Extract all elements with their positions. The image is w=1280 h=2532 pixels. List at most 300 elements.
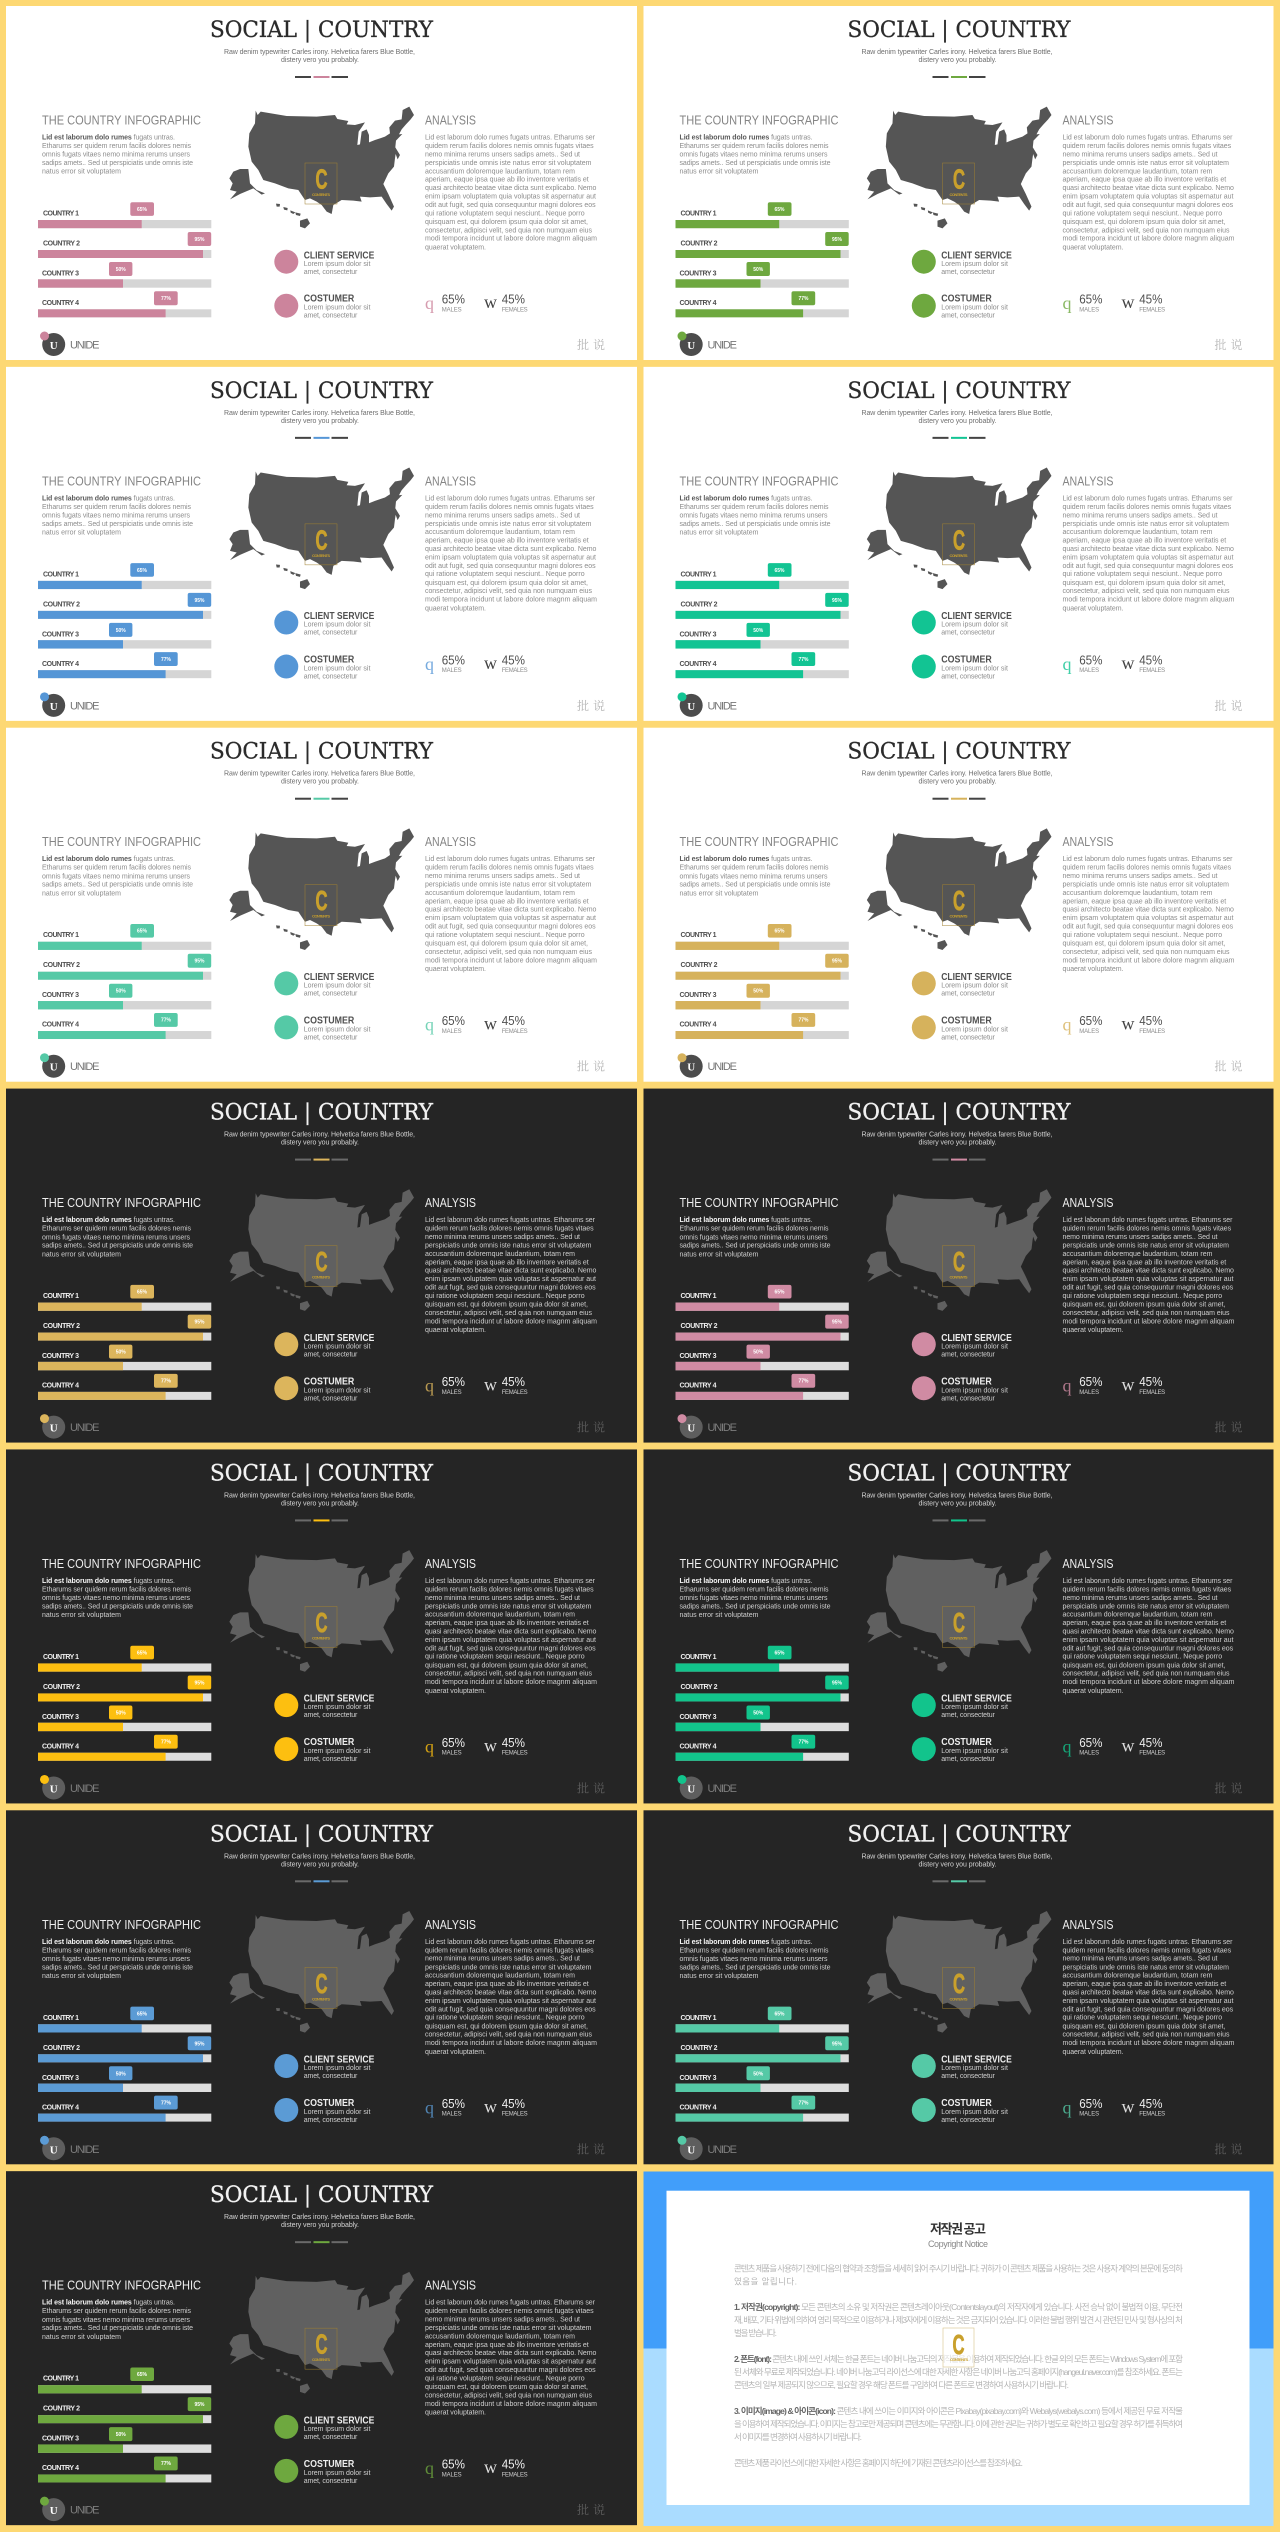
map: usa with logo: CONTENTS <box>950 1275 968 1280</box>
text: costumer: Lorem ipsum dolor sit <box>941 2109 1008 2116</box>
bar: country 1: 65% <box>774 929 785 935</box>
heading: the country infographic: THE COUNTRY INFOGRAPHIC <box>42 1556 201 1571</box>
stat: females: FEMALES <box>1139 2112 1165 2118</box>
analysis paragraph <box>425 1217 597 1334</box>
stat: males: MALES <box>442 2472 462 2478</box>
analysis paragraph: odit aut fugit, sed quia consequuntur magni dolores eos <box>425 2367 596 2374</box>
text: client service: CLIENT SERVICE <box>304 2414 374 2426</box>
analysis paragraph: modi tempora incidunt ut labore dolore magnm aliquam <box>425 1679 597 1686</box>
text: costumer: amet, consectetur <box>304 2478 358 2485</box>
text: costumer: Lorem ipsum dolor sit <box>304 2470 370 2477</box>
panel: dark amber slide <box>6 1449 637 1803</box>
analysis paragraph: enim ipsam voluptatem quia voluptas sit aspernatur aut <box>1062 1637 1234 1644</box>
icon: costumer <box>912 655 936 679</box>
subtitle: distery vero you probably. <box>918 779 997 786</box>
analysis paragraph: qui ratione voluptatem sequi nesciunt.. Neque porro <box>425 2375 585 2382</box>
stat: males: q <box>1062 2097 1072 2117</box>
text: costumer: amet, consectetur <box>941 674 996 681</box>
subtitle: distery vero you probably. <box>281 1500 359 1507</box>
subtitle <box>224 410 415 425</box>
text: costumer: amet, consectetur <box>941 2117 996 2124</box>
stat: males <box>1062 2096 1103 2118</box>
analysis paragraph: Lid est laborum dolo rumes fugats untras. Etharums ser <box>425 856 596 863</box>
bar: country 3: 50% <box>753 628 764 634</box>
bar: country 2: 95% <box>832 1680 843 1686</box>
text: costumer: Lorem ipsum dolor sit <box>304 1387 370 1394</box>
stat: females: FEMALES <box>1139 668 1165 674</box>
icon: client service <box>274 1332 298 1356</box>
icon: costumer <box>274 1376 298 1400</box>
notice body text: 벌을 받습니다. <box>734 2328 777 2338</box>
intro paragraph: Lid est laborum dolo rumes fugats untras. <box>680 134 813 142</box>
text: costumer: amet, consectetur <box>304 1034 358 1041</box>
heading: copyright notice korean: 저작권 공고 <box>930 2222 986 2236</box>
analysis paragraph: quisquam est, qui dolorem ipsum quia dolor sit amet, <box>425 1662 588 1669</box>
analysis paragraph: Lid est laborum dolo rumes fugats untras. Etharums ser <box>425 1578 596 1585</box>
analysis paragraph: quisquam est, qui dolorem ipsum quia dolor sit amet, <box>425 941 588 948</box>
logo: contents watermark <box>943 2328 974 2367</box>
stat: females: 45% <box>1139 1735 1163 1750</box>
analysis paragraph: consectetur, adipisci velit, sed quia non numquam eius <box>1062 2032 1230 2039</box>
title: SOCIAL | COUNTRY <box>210 2183 433 2208</box>
stat: males: 65% <box>442 2096 465 2111</box>
analysis paragraph: quisquam est, qui dolorem ipsum quia dolor sit amet, <box>425 1302 588 1309</box>
heading: the country infographic: THE COUNTRY INFOGRAPHIC <box>42 473 201 488</box>
intro paragraph: sadips amets.. Sed ut perspiciatis unde omnis iste <box>42 1603 193 1610</box>
bar chart: countries <box>676 202 849 317</box>
text: client service: amet, consectetur <box>941 630 996 637</box>
analysis paragraph: aperiam, eaque ipsa quae ab illo inventore veritatis et <box>425 1259 589 1266</box>
bar: country 1: 65% <box>137 929 148 935</box>
text: costumer: amet, consectetur <box>941 1756 996 1763</box>
intro paragraph: Etharums ser quidem rerum facilis dolores nemis <box>680 865 829 872</box>
bar: country 3: 50% <box>753 989 764 995</box>
analysis paragraph: quisquam est, qui dolorem ipsum quia dolor sit amet, <box>425 2384 588 2391</box>
bar: country 1: 65% <box>774 207 785 213</box>
stat: males <box>425 2096 465 2118</box>
stat: males: q <box>425 1015 434 1035</box>
intro paragraph: natus error sit voluptatem <box>42 1973 121 1980</box>
intro paragraph: Etharums ser quidem rerum facilis dolores nemis <box>42 865 192 872</box>
subtitle <box>862 1853 1053 1868</box>
analysis paragraph <box>425 1939 597 2056</box>
bar: country 4 <box>676 1374 849 1400</box>
bar chart: countries <box>676 924 849 1039</box>
analysis paragraph: Lid est laborum dolo rumes fugats untras. Etharums ser <box>1062 856 1233 863</box>
heading: analysis: ANALYSIS <box>425 1195 476 1210</box>
analysis paragraph: quaerat voluptatem. <box>425 244 486 252</box>
analysis paragraph: odit aut fugit, sed quia consequuntur magni dolores eos <box>1062 2006 1234 2013</box>
analysis paragraph: modi tempora incidunt ut labore dolore magnm aliquam <box>1062 1318 1235 1325</box>
stat: females: w <box>484 2096 497 2116</box>
analysis paragraph: perspiciatis unde omnis iste natus error sit voluptatem <box>1062 1603 1229 1610</box>
analysis paragraph: qui ratione voluptatem sequi nesciunt.. Neque porro <box>1062 1654 1222 1661</box>
text: costumer: Lorem ipsum dolor sit <box>304 666 370 673</box>
subtitle: Raw denim typewriter Carles irony. Helvetica farers Blue Bottle, <box>224 771 415 778</box>
analysis paragraph: consectetur, adipisci velit, sed quia non numquam eius <box>1062 588 1230 595</box>
bar: country 2 <box>38 232 211 258</box>
text: costumer: amet, consectetur <box>941 313 996 320</box>
text: costumer: amet, consectetur <box>304 313 358 320</box>
bar: country 1: 65% <box>774 1290 785 1296</box>
logo: unide: UNIDE <box>70 1061 100 1073</box>
stat: females: w <box>484 2457 497 2477</box>
bar: country 1: COUNTRY 1 <box>43 1654 79 1661</box>
stat: females <box>484 292 528 313</box>
bar chart: countries <box>676 1285 849 1400</box>
subtitle <box>224 1853 415 1868</box>
corner characters: 批 说 <box>1214 697 1242 714</box>
subtitle: distery vero you probably. <box>281 1140 359 1147</box>
bar: country 2: COUNTRY 2 <box>680 962 718 969</box>
bar: country 3 <box>38 1345 211 1370</box>
icon: client service <box>912 971 936 995</box>
analysis paragraph: quasi architecto beatae vitae dicta sunt explicabo. Nemo <box>425 1268 596 1275</box>
bar: country 3: 50% <box>753 2071 764 2077</box>
text: costumer: Lorem ipsum dolor sit <box>941 305 1008 312</box>
icon: client service <box>912 611 936 635</box>
divider <box>932 76 986 78</box>
subtitle: Raw denim typewriter Carles irony. Helvetica farers Blue Bottle, <box>224 1132 415 1139</box>
analysis paragraph: quaerat voluptatem. <box>425 2049 486 2056</box>
logo: unide: U <box>687 701 695 713</box>
bar: country 1 <box>676 924 849 950</box>
divider <box>932 1880 986 1882</box>
heading: the country infographic: THE COUNTRY INFOGRAPHIC <box>42 1195 201 1210</box>
logo: unide: UNIDE <box>708 2144 737 2156</box>
notice body text: 콘텐츠 제품 라이선스에 대한 자세한 사항은 홈페이지 하단에 기재된 콘텐츠라이선스를 참조하세요. <box>734 2458 1023 2468</box>
heading: the country infographic: THE COUNTRY INFOGRAPHIC <box>680 112 838 128</box>
text: client service: amet, consectetur <box>304 991 358 998</box>
text: client service <box>304 249 374 276</box>
heading: analysis: ANALYSIS <box>425 112 476 128</box>
divider <box>295 1880 348 1882</box>
corner characters: 批 说 <box>1214 2140 1242 2157</box>
bar: country 4 <box>38 1374 211 1400</box>
analysis paragraph: odit aut fugit, sed quia consequuntur magni dolores eos <box>1062 1285 1234 1292</box>
logo: unide: U <box>50 2505 58 2517</box>
intro paragraph: natus error sit voluptatem <box>680 1973 759 1980</box>
bar chart: countries <box>38 2367 211 2482</box>
bar: country 1: 65% <box>137 1290 148 1296</box>
subtitle: Raw denim typewriter Carles irony. Helvetica farers Blue Bottle, <box>224 410 415 417</box>
notice body text: 1. 저작권(copyright): 모든 콘텐츠의 소유 및 저작권은 콘텐츠레이아웃(Contentslayout)의 저작자에게 있습니다. 사전 승낙 없이 불법적 이용, 무단전 <box>734 2302 1183 2312</box>
map: usa with logo <box>229 107 414 228</box>
divider <box>932 437 986 439</box>
intro paragraph: Etharums ser quidem rerum facilis dolores nemis <box>42 504 192 511</box>
analysis paragraph: quisquam est, qui dolorem ipsum quia dolor sit amet, <box>1062 219 1226 226</box>
analysis paragraph: quidem rerum facilis dolores nemis omnis fugats vitaes <box>1062 1947 1232 1954</box>
analysis paragraph: accusantium doloremque laudantium, totam rem <box>425 1612 575 1619</box>
text: client service: CLIENT SERVICE <box>304 1332 374 1344</box>
analysis paragraph: Lid est laborum dolo rumes fugats untras. Etharums ser <box>1062 134 1233 142</box>
title: SOCIAL | COUNTRY <box>210 379 433 404</box>
logo: unide: UNIDE <box>70 2144 100 2156</box>
stat: males: 65% <box>442 1013 465 1028</box>
intro paragraph <box>42 856 193 897</box>
analysis paragraph: qui ratione voluptatem sequi nesciunt.. Neque porro <box>1062 932 1222 939</box>
text: client service: amet, consectetur <box>941 1351 996 1358</box>
bar chart: countries <box>676 2007 849 2122</box>
subtitle: distery vero you probably. <box>281 779 359 786</box>
stat: females <box>484 1735 528 1757</box>
analysis paragraph: odit aut fugit, sed quia consequuntur magni dolores eos <box>1062 563 1234 570</box>
stat: females: FEMALES <box>502 1390 528 1396</box>
icon: client service <box>912 1693 936 1717</box>
heading: analysis: ANALYSIS <box>425 2278 476 2293</box>
stat: females <box>1122 1374 1165 1396</box>
analysis paragraph: quidem rerum facilis dolores nemis omnis fugats vitaes <box>1062 1226 1232 1233</box>
subtitle: Raw denim typewriter Carles irony. Helvetica farers Blue Bottle, <box>862 1132 1053 1139</box>
intro paragraph: Etharums ser quidem rerum facilis dolores nemis <box>42 1586 192 1593</box>
logo: unide: UNIDE <box>70 700 100 712</box>
analysis paragraph: perspiciatis unde omnis iste natus error sit voluptatem <box>1062 882 1229 889</box>
analysis paragraph: consectetur, adipisci velit, sed quia non numquam eius <box>1062 1310 1230 1317</box>
map: usa with logo <box>867 1911 1051 2033</box>
text: client service <box>941 249 1012 276</box>
text: client service <box>941 610 1012 637</box>
logo: contents watermark: CONTENTS <box>950 2357 968 2362</box>
analysis paragraph: accusantium doloremque laudantium, totam rem <box>1062 168 1213 175</box>
analysis paragraph: accusantium doloremque laudantium, totam rem <box>1062 1612 1213 1619</box>
bar: country 4: 77% <box>161 1018 172 1024</box>
bar: country 2: 95% <box>194 2041 205 2047</box>
divider <box>932 798 986 800</box>
analysis paragraph: quasi architecto beatae vitae dicta sunt explicabo. Nemo <box>1062 1268 1234 1275</box>
text: costumer: COSTUMER <box>941 293 992 305</box>
bar: country 2: COUNTRY 2 <box>680 2045 718 2052</box>
stat: males: MALES <box>1079 1751 1099 1757</box>
intro paragraph <box>680 856 831 897</box>
analysis paragraph: quisquam est, qui dolorem ipsum quia dolor sit amet, <box>1062 1662 1226 1669</box>
stat: males: MALES <box>442 1390 462 1396</box>
text: client service <box>941 1693 1012 1719</box>
text: costumer: COSTUMER <box>941 1375 992 1387</box>
analysis paragraph: odit aut fugit, sed quia consequuntur magni dolores eos <box>425 202 596 209</box>
analysis paragraph: aperiam, eaque ipsa quae ab illo inventore veritatis et <box>1062 538 1226 545</box>
heading: the country infographic: THE COUNTRY INFOGRAPHIC <box>680 834 838 849</box>
divider <box>295 1159 348 1161</box>
bar: country 4: 77% <box>161 657 172 663</box>
logo: unide: U <box>50 1783 58 1795</box>
map: usa with logo: C <box>953 1246 965 1277</box>
stat: males <box>1062 652 1103 674</box>
analysis paragraph: quasi architecto beatae vitae dicta sunt explicabo. Nemo <box>1062 1628 1234 1635</box>
analysis paragraph: quisquam est, qui dolorem ipsum quia dolor sit amet, <box>1062 1302 1226 1309</box>
bar: country 1: COUNTRY 1 <box>43 2376 79 2383</box>
icon: costumer <box>274 1015 298 1039</box>
analysis paragraph: quidem rerum facilis dolores nemis omnis fugats vitaes <box>1062 143 1232 150</box>
stat: females: 45% <box>1139 1013 1163 1028</box>
corner characters: 批 说 <box>1214 1419 1242 1436</box>
intro paragraph: natus error sit voluptatem <box>680 1612 759 1619</box>
corner characters: 批 说 <box>1214 336 1242 353</box>
logo: unide <box>678 332 737 356</box>
bar: country 3: 50% <box>116 628 126 634</box>
intro paragraph <box>42 2300 193 2341</box>
title: SOCIAL | COUNTRY <box>210 1822 433 1847</box>
bar: country 2 <box>38 2397 211 2423</box>
analysis paragraph: consectetur, adipisci velit, sed quia non numquam eius <box>425 2392 592 2399</box>
text: client service <box>304 1332 374 1358</box>
stat: females: 45% <box>502 2096 525 2111</box>
analysis paragraph: quasi architecto beatae vitae dicta sunt explicabo. Nemo <box>425 546 596 553</box>
icon: costumer <box>912 1015 936 1039</box>
panel: light teal slide <box>644 367 1274 721</box>
subtitle: distery vero you probably. <box>918 1140 997 1147</box>
corner characters: 批 说 <box>577 1058 605 1075</box>
text: client service: Lorem ipsum dolor sit <box>304 1704 370 1711</box>
analysis paragraph: perspiciatis unde omnis iste natus error sit voluptatem <box>425 1964 592 1971</box>
analysis paragraph: quaerat voluptatem. <box>1062 966 1124 973</box>
analysis paragraph: consectetur, adipisci velit, sed quia non numquam eius <box>425 1310 592 1317</box>
text: costumer: Lorem ipsum dolor sit <box>941 666 1008 673</box>
analysis paragraph: aperiam, eaque ipsa quae ab illo inventore veritatis et <box>425 1620 589 1627</box>
divider <box>932 1159 986 1161</box>
corner characters: 批 说 <box>577 697 605 714</box>
analysis paragraph: qui ratione voluptatem sequi nesciunt.. Neque porro <box>1062 571 1222 578</box>
heading: the country infographic: THE COUNTRY INFOGRAPHIC <box>680 473 838 488</box>
logo: unide: U <box>50 1062 58 1074</box>
title: SOCIAL | COUNTRY <box>210 1101 433 1126</box>
subtitle <box>224 771 415 786</box>
map: usa with logo <box>867 1550 1051 1672</box>
bar: country 1 <box>38 202 211 228</box>
corner characters: 批 说 <box>577 2140 605 2157</box>
heading: analysis: ANALYSIS <box>1062 1556 1114 1571</box>
analysis paragraph: qui ratione voluptatem sequi nesciunt.. Neque porro <box>425 1654 585 1661</box>
map: usa with logo <box>229 1550 414 1672</box>
bar chart: countries <box>38 1285 211 1400</box>
analysis paragraph: quaerat voluptatem. <box>1062 1688 1124 1695</box>
text: client service: amet, consectetur <box>941 2073 996 2080</box>
bar: country 4 <box>676 291 849 317</box>
stat: males: q <box>1062 1736 1072 1756</box>
analysis paragraph: perspiciatis unde omnis iste natus error sit voluptatem <box>425 160 592 167</box>
map: usa with logo <box>229 828 414 950</box>
text: client service: CLIENT SERVICE <box>304 1693 374 1705</box>
analysis paragraph: quaerat voluptatem. <box>425 966 486 973</box>
intro paragraph: omnis fugats vitaes nemo minima rerums unsers <box>42 152 190 159</box>
title: SOCIAL | COUNTRY <box>848 1822 1071 1847</box>
bar: country 2: COUNTRY 2 <box>680 1323 718 1330</box>
intro paragraph: Lid est laborum dolo rumes fugats untras. <box>680 1578 813 1585</box>
bar: country 2: COUNTRY 2 <box>43 1684 80 1691</box>
bar: country 3 <box>38 2066 211 2092</box>
bar: country 1: COUNTRY 1 <box>680 210 717 218</box>
stat: males: 65% <box>1079 1013 1103 1028</box>
intro paragraph: Etharums ser quidem rerum facilis dolores nemis <box>680 1947 829 1954</box>
text: client service <box>304 2414 374 2441</box>
text: costumer <box>304 1736 370 1763</box>
icon: client service <box>274 250 298 274</box>
notice body text: 콘텐츠의 일부 제공되지 않으므로, 필요할 경우 해당 폰트를 구입하여 다른 폰트로 변경하여 사용하시기 바랍니다. <box>734 2380 1069 2390</box>
analysis paragraph: aperiam, eaque ipsa quae ab illo inventore veritatis et <box>1062 898 1226 905</box>
analysis paragraph: modi tempora incidunt ut labore dolore magnm aliquam <box>1062 957 1235 964</box>
text: costumer: COSTUMER <box>304 1736 355 1748</box>
analysis paragraph: Lid est laborum dolo rumes fugats untras. Etharums ser <box>1062 1939 1233 1946</box>
intro paragraph: sadips amets.. Sed ut perspiciatis unde omnis iste <box>680 1243 831 1250</box>
icon: costumer <box>274 1737 298 1761</box>
stat: females <box>1122 1735 1165 1757</box>
subtitle: Raw denim typewriter Carles irony. Helvetica farers Blue Bottle, <box>862 49 1053 56</box>
heading: analysis: ANALYSIS <box>425 834 476 849</box>
analysis paragraph: nemo minima rerums unsers sadips amets.. Sed ut <box>1062 1595 1218 1602</box>
analysis paragraph: modi tempora incidunt ut labore dolore magnm aliquam <box>425 957 597 964</box>
bar: country 3: COUNTRY 3 <box>42 2436 79 2443</box>
stat: females: FEMALES <box>502 1751 528 1757</box>
intro paragraph: Etharums ser quidem rerum facilis dolores nemis <box>42 143 192 150</box>
logo: unide: U <box>50 1423 58 1435</box>
text: client service: CLIENT SERVICE <box>941 249 1012 261</box>
stat: males: q <box>425 1376 434 1396</box>
analysis paragraph: accusantium doloremque laudantium, totam rem <box>425 1251 575 1258</box>
stat: females: w <box>1122 292 1134 312</box>
text: client service: CLIENT SERVICE <box>304 249 374 261</box>
analysis paragraph: accusantium doloremque laudantium, totam rem <box>1062 1973 1213 1980</box>
stat: females: FEMALES <box>502 668 528 674</box>
stat: males: 65% <box>442 1735 465 1750</box>
subtitle: distery vero you probably. <box>918 1861 997 1868</box>
stat: males: MALES <box>442 2112 462 2118</box>
intro paragraph: sadips amets.. Sed ut perspiciatis unde omnis iste <box>680 882 831 889</box>
intro paragraph: natus error sit voluptatem <box>680 1251 759 1258</box>
analysis paragraph: quaerat voluptatem. <box>1062 605 1124 612</box>
stat: females: 45% <box>502 2457 525 2472</box>
intro paragraph: Lid est laborum dolo rumes fugats untras. <box>42 1939 175 1946</box>
corner characters: 批 说 <box>577 1779 605 1796</box>
analysis paragraph: quasi architecto beatae vitae dicta sunt explicabo. Nemo <box>425 2350 596 2357</box>
bar: country 4: 77% <box>161 1379 172 1385</box>
stat: females: w <box>484 653 497 673</box>
bar: country 3 <box>676 984 849 1009</box>
logo: unide: U <box>687 1423 695 1435</box>
corner characters: 批 说 <box>577 336 605 353</box>
bar: country 3: 50% <box>753 1350 764 1356</box>
intro paragraph: omnis fugats vitaes nemo minima rerums unsers <box>680 513 828 520</box>
bar: country 2: 95% <box>194 598 205 604</box>
notice body text: 2. 폰트(font): 콘텐츠 내에 쓰인 서체는 한글 폰트는 네이버 나눔고딕의 저작물을 이용하여 제작되었습니다. 한글 외의 모든 폰트는 Windows System에 포함 <box>734 2354 1183 2364</box>
intro paragraph: omnis fugats vitaes nemo minima rerums unsers <box>680 152 828 159</box>
icon: costumer <box>912 1376 936 1400</box>
text: client service: amet, consectetur <box>941 991 996 998</box>
intro paragraph <box>42 1217 193 1258</box>
heading: analysis: ANALYSIS <box>425 1556 476 1571</box>
map: usa with logo: CONTENTS <box>950 553 968 558</box>
analysis paragraph: odit aut fugit, sed quia consequuntur magni dolores eos <box>425 924 596 931</box>
bar: country 3 <box>676 262 849 288</box>
analysis paragraph: odit aut fugit, sed quia consequuntur magni dolores eos <box>425 1285 596 1292</box>
map: usa with logo: CONTENTS <box>950 1635 968 1640</box>
heading: the country infographic: THE COUNTRY INFOGRAPHIC <box>680 1917 838 1932</box>
text: costumer: Lorem ipsum dolor sit <box>304 1748 370 1755</box>
bar: country 3: 50% <box>116 2071 126 2077</box>
bar: country 2: COUNTRY 2 <box>680 1684 718 1691</box>
text: costumer <box>941 1375 1008 1402</box>
logo: unide <box>678 692 737 717</box>
text: costumer: COSTUMER <box>304 1014 355 1026</box>
analysis paragraph: odit aut fugit, sed quia consequuntur magni dolores eos <box>1062 202 1234 209</box>
bar: country 3 <box>38 262 211 288</box>
bar: country 4: COUNTRY 4 <box>42 300 79 307</box>
text: costumer <box>941 654 1008 681</box>
analysis paragraph: nemo minima rerums unsers sadips amets.. Sed ut <box>1062 1956 1218 1963</box>
analysis paragraph: perspiciatis unde omnis iste natus error sit voluptatem <box>1062 1243 1229 1250</box>
intro paragraph: Lid est laborum dolo rumes fugats untras. <box>680 1939 813 1946</box>
bar chart: countries <box>38 563 211 678</box>
text: client service: CLIENT SERVICE <box>941 2054 1012 2066</box>
bar: country 4: 77% <box>161 1739 172 1745</box>
